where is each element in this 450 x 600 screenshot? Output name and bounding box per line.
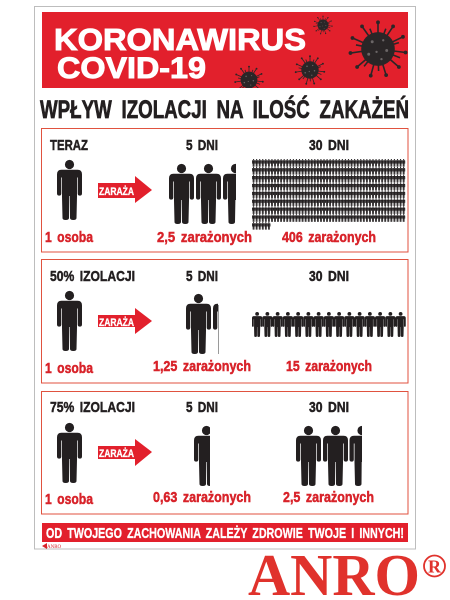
value: 1 osoba: 1 osoba bbox=[45, 491, 94, 508]
label: 30 dni: 30 DNI bbox=[309, 399, 349, 416]
value: 406 zarażonych: 406 zarażonych bbox=[282, 229, 376, 246]
arrow: zaraża: ZARAŻA bbox=[99, 185, 134, 198]
value: 1 osoba: 1 osoba bbox=[45, 360, 94, 377]
icon: 0.63 person bbox=[194, 426, 210, 486]
label: teraz: TERAZ bbox=[50, 137, 88, 154]
panel: 50% izolacji bbox=[42, 260, 408, 383]
arrow: zaraża bbox=[98, 308, 152, 334]
value: 1,25 zarażonych: 1,25 zarażonych bbox=[153, 358, 251, 375]
icons: 406 people bbox=[252, 159, 405, 230]
icons: 2.5 people bbox=[169, 164, 236, 224]
panel: teraz bbox=[42, 128, 408, 252]
icon: one person bbox=[57, 291, 82, 351]
title: covid-19: COVID-19 bbox=[57, 52, 206, 85]
title: koronawirus: KORONAWIRUS bbox=[54, 22, 306, 57]
label: 5 dni: 5 DNI bbox=[186, 137, 218, 154]
label: 30 dni: 30 DNI bbox=[309, 268, 349, 285]
icons: 1.25 people bbox=[186, 294, 219, 354]
icon: one person bbox=[57, 160, 82, 220]
icons: 2.5 people bbox=[296, 426, 362, 486]
label: 30 dni: 30 DNI bbox=[309, 137, 349, 154]
value: 1 osoba: 1 osoba bbox=[45, 229, 94, 246]
value: 2,5 zarażonych: 2,5 zarażonych bbox=[283, 489, 374, 506]
label: 75% izolacji: 75% IZOLACJI bbox=[50, 399, 135, 416]
label: 5 dni: 5 DNI bbox=[186, 268, 218, 285]
icon: large virus bbox=[349, 20, 407, 78]
label: 50% izolacji: 50% IZOLACJI bbox=[50, 268, 135, 285]
arrow: zaraża bbox=[98, 176, 152, 203]
registered mark bbox=[424, 556, 445, 576]
icons: 15 people bbox=[252, 312, 406, 337]
value: 15 zarażonych: 15 zarażonych bbox=[286, 358, 372, 375]
small anro logo bbox=[42, 543, 62, 550]
label: 5 dni: 5 DNI bbox=[186, 399, 218, 416]
panel: 75% izolacji bbox=[42, 392, 408, 514]
value: 2,5 zarażonych: 2,5 zarażonych bbox=[157, 229, 252, 246]
arrow: zaraża bbox=[98, 439, 152, 466]
header banner bbox=[42, 12, 408, 94]
icon: small virus top bbox=[313, 16, 333, 34]
icon: virus clipped at banner edge bbox=[234, 66, 264, 88]
poster frame bbox=[34, 6, 416, 549]
icon: one person bbox=[57, 423, 82, 483]
registered mark: R bbox=[428, 556, 442, 576]
arrow: zaraża: ZARAŻA bbox=[99, 316, 134, 329]
value: 0,63 zarażonych: 0,63 zarażonych bbox=[153, 489, 251, 506]
icon: virus middle bbox=[295, 55, 325, 85]
small anro logo: ANRO bbox=[47, 545, 62, 550]
arrow: zaraża: ZARAŻA bbox=[99, 447, 134, 460]
